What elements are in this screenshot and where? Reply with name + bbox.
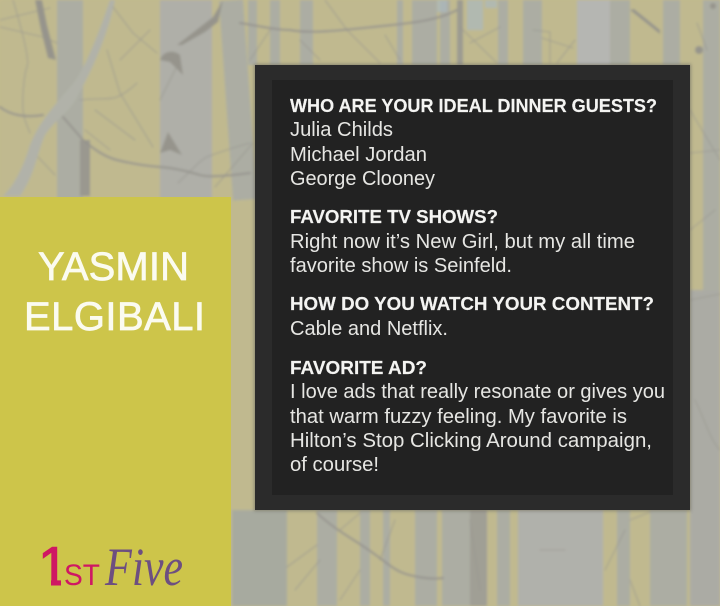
heading: name: YASMIN — [38, 245, 189, 289]
text block: dinner guests — [290, 96, 657, 190]
text block: favorite ad: I love ads that really resonate or gives you — [290, 381, 665, 403]
text block: watching content — [290, 294, 654, 340]
heading: name — [24, 245, 205, 339]
panel: yellow name block — [0, 197, 231, 606]
text block: dinner guests: George Clooney — [290, 168, 435, 190]
logo: 1st Five: 1 — [38, 535, 69, 597]
text block: favorite ad: that warm fuzzy feeling. My favorite is — [290, 406, 627, 428]
text block: favorite ad: Hilton’s Stop Clicking Around campaign, — [290, 430, 652, 452]
text block: dinner guests: Julia Childs — [290, 119, 393, 141]
heading: name: ELGIBALI — [24, 295, 205, 339]
text block: TV shows — [290, 207, 635, 277]
panel: Q&A dark card — [254, 64, 691, 511]
logo: 1st Five — [42, 546, 182, 586]
text block: watching content: Cable and Netflix. — [290, 318, 448, 340]
text block: favorite ad: FAVORITE AD? — [290, 358, 427, 378]
text block: TV shows: favorite show is Seinfeld. — [290, 255, 512, 277]
logo: 1st Five: Five — [104, 537, 183, 597]
text block: TV shows: Right now it’s New Girl, but my all time — [290, 231, 635, 253]
text block: watching content: HOW DO YOU WATCH YOUR CONTENT? — [290, 294, 654, 314]
text block: favorite ad — [290, 358, 665, 476]
text block: dinner guests: Michael Jordan — [290, 144, 427, 166]
logo: 1st Five: ST — [64, 559, 100, 592]
text block: TV shows: FAVORITE TV SHOWS? — [290, 207, 498, 227]
text block: dinner guests: WHO ARE YOUR IDEAL DINNER GUESTS? — [290, 96, 657, 116]
text block: favorite ad: of course! — [290, 454, 379, 476]
